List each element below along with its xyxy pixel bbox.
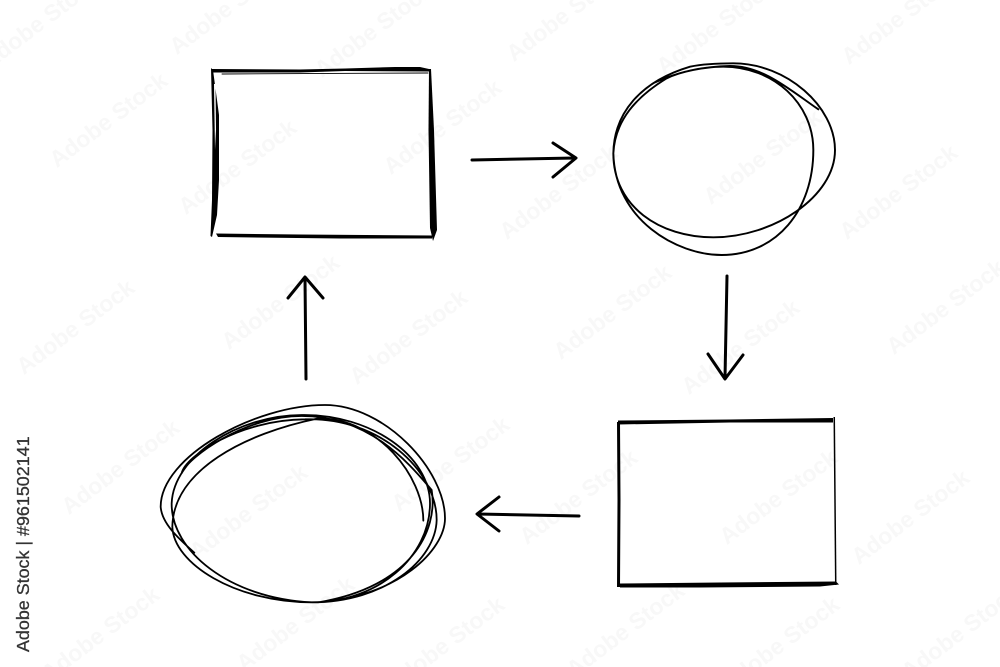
watermark pattern: Adobe Stock (184, 459, 312, 564)
watermark pattern: Adobe Stock (344, 284, 472, 389)
watermark pattern: Adobe Stock (676, 294, 804, 399)
arrow: bottom rectangle to oval (477, 497, 579, 531)
watermark pattern: Adobe Stock (56, 414, 184, 519)
shape: bottom-right sketched rectangle (617, 417, 839, 588)
shape: bottom-left sketched oval (161, 405, 445, 602)
watermark pattern: Adobe Stock (714, 444, 842, 549)
watermark pattern: Adobe Stock (378, 74, 506, 179)
watermark pattern: Adobe Stock (494, 139, 622, 244)
watermark pattern: Adobe Stock (514, 444, 642, 549)
arrow: circle to bottom rectangle (708, 276, 743, 379)
stock id side label: Adobe Stock | #961502141 (13, 436, 33, 652)
arrow: oval to top rectangle (288, 277, 323, 379)
watermark pattern: Adobe Stock (216, 249, 344, 354)
arrow: top rectangle to circle (472, 143, 576, 177)
watermark pattern: Adobe Stock (834, 139, 962, 244)
watermark pattern: Adobe Stock (11, 274, 139, 379)
shape: top-right sketched circle (613, 63, 835, 255)
watermark pattern: Adobe Stock (846, 464, 974, 569)
watermark pattern: Adobe Stock (44, 67, 172, 172)
watermark pattern: Adobe Stock (548, 259, 676, 364)
watermark pattern: Adobe Stock (173, 114, 301, 219)
watermark pattern: Adobe Stock (698, 104, 826, 209)
watermark pattern: Adobe Stock (386, 411, 514, 516)
shape: top-left sketched rectangle (210, 67, 437, 241)
